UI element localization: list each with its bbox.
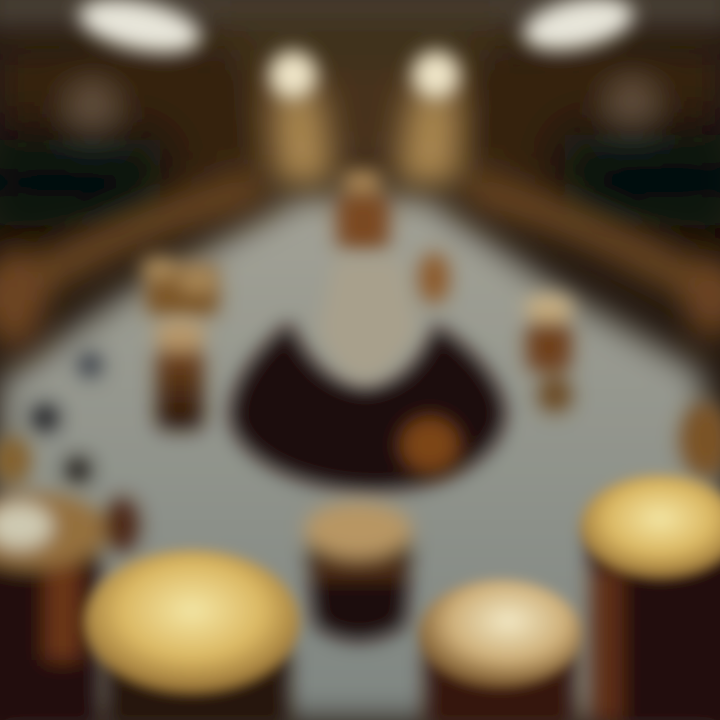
- cup: far left rail: [0, 250, 43, 350]
- foreground cups: [0, 402, 720, 720]
- light: top right: [518, 0, 638, 59]
- central figure: [231, 170, 505, 490]
- wooden rail ring: [0, 190, 720, 300]
- cup: right edge small: [679, 402, 720, 478]
- figure: hand: [398, 415, 462, 475]
- light: centre right: [412, 51, 460, 99]
- cup: left upper: [140, 256, 220, 317]
- cup: left edge: [0, 436, 140, 720]
- cup: right: [524, 294, 574, 413]
- dark panels: [0, 135, 720, 225]
- light: centre left: [269, 51, 317, 99]
- cup: centre right small: [418, 252, 450, 304]
- figure: dark body: [231, 322, 505, 490]
- ceiling lights: [74, 0, 638, 99]
- cup: far right rail: [690, 260, 720, 340]
- cup: large right: [580, 475, 720, 720]
- figure: head cup: [336, 170, 390, 250]
- floor: [0, 195, 720, 720]
- cup: centre foreground: [304, 502, 412, 640]
- light beams: [272, 90, 460, 185]
- ceiling: [0, 0, 720, 170]
- cup: large bottom left: [84, 550, 300, 720]
- mid-distance cups: [0, 250, 720, 484]
- figure: white beard: [318, 258, 418, 382]
- side walls: [0, 50, 720, 240]
- cup: dark spots on left floor: [30, 352, 103, 484]
- light: top left: [74, 0, 206, 62]
- cup: left middle: [154, 319, 206, 430]
- cup: large bottom right: [418, 580, 582, 720]
